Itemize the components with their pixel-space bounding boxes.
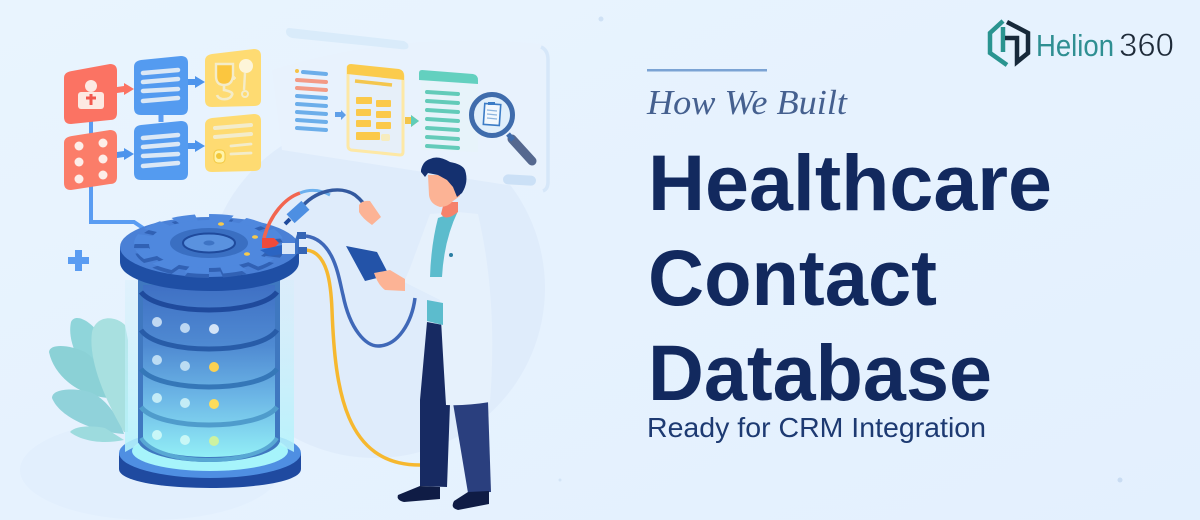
red box: grid dots bbox=[64, 130, 117, 190]
title: Contact bbox=[648, 233, 937, 322]
source list bbox=[295, 69, 326, 130]
hair bbox=[421, 158, 466, 197]
blue box top bbox=[134, 56, 188, 115]
yellow cable bbox=[306, 250, 420, 465]
red cable bbox=[264, 193, 300, 238]
connector pipe to gear bbox=[91, 120, 143, 228]
tagline: Ready for CRM Integration bbox=[647, 412, 986, 443]
top gear plate bbox=[120, 217, 299, 291]
face bbox=[428, 175, 460, 207]
red plug bbox=[262, 238, 279, 248]
title: Database bbox=[648, 328, 992, 417]
icon: magnifying glass bbox=[472, 94, 532, 161]
top plug bbox=[285, 201, 309, 224]
logo: 360 bbox=[1119, 27, 1174, 63]
yellow card: stethoscope bbox=[205, 49, 261, 107]
yellow card: profile record bbox=[205, 114, 261, 172]
arrow: red to blue bottom bbox=[117, 148, 134, 160]
red box: medical profile bbox=[64, 64, 117, 124]
blue box bottom bbox=[134, 121, 188, 180]
upper hand bbox=[359, 201, 381, 225]
back leg bbox=[453, 402, 491, 493]
status lights bbox=[152, 317, 219, 446]
lower hand bbox=[374, 270, 405, 291]
base plate bbox=[119, 428, 301, 488]
accent rule bbox=[647, 69, 767, 72]
leaves bbox=[49, 318, 128, 442]
arrow: red to blue top bbox=[117, 83, 134, 95]
scrub top bbox=[427, 211, 458, 325]
database cylinder bbox=[119, 217, 301, 488]
shoes bbox=[398, 486, 489, 510]
logo mark bbox=[990, 21, 1028, 65]
title bbox=[648, 138, 1052, 417]
arrow: blue to yellow bottom bbox=[188, 140, 205, 152]
flow diagram bbox=[64, 49, 261, 228]
cables and connectors bbox=[260, 190, 420, 465]
tablet bbox=[346, 246, 389, 281]
coat badge bbox=[449, 253, 453, 257]
dark blue hand cable bbox=[300, 190, 369, 212]
lab coat bbox=[404, 212, 492, 405]
arrow: list to form bbox=[335, 110, 346, 120]
glass casing bbox=[125, 280, 294, 452]
front leg bbox=[420, 322, 450, 487]
logo wordmark: Helion bbox=[1036, 28, 1114, 63]
arrow: form to result bbox=[405, 115, 419, 127]
floating dashboard panel bbox=[272, 28, 548, 191]
logo bbox=[990, 21, 1174, 65]
port block bbox=[260, 232, 307, 256]
arrow: blue to yellow top bbox=[188, 76, 205, 88]
icon: plus bbox=[68, 250, 89, 271]
blue cable bbox=[306, 236, 415, 346]
yellow form card bbox=[347, 64, 404, 155]
doctor figure bbox=[346, 158, 492, 510]
title: Healthcare bbox=[648, 138, 1052, 227]
stacked database body bbox=[138, 280, 280, 462]
neck bbox=[441, 202, 458, 218]
teal result card bbox=[419, 70, 478, 152]
subtitle: how we built: How We Built bbox=[646, 83, 848, 122]
